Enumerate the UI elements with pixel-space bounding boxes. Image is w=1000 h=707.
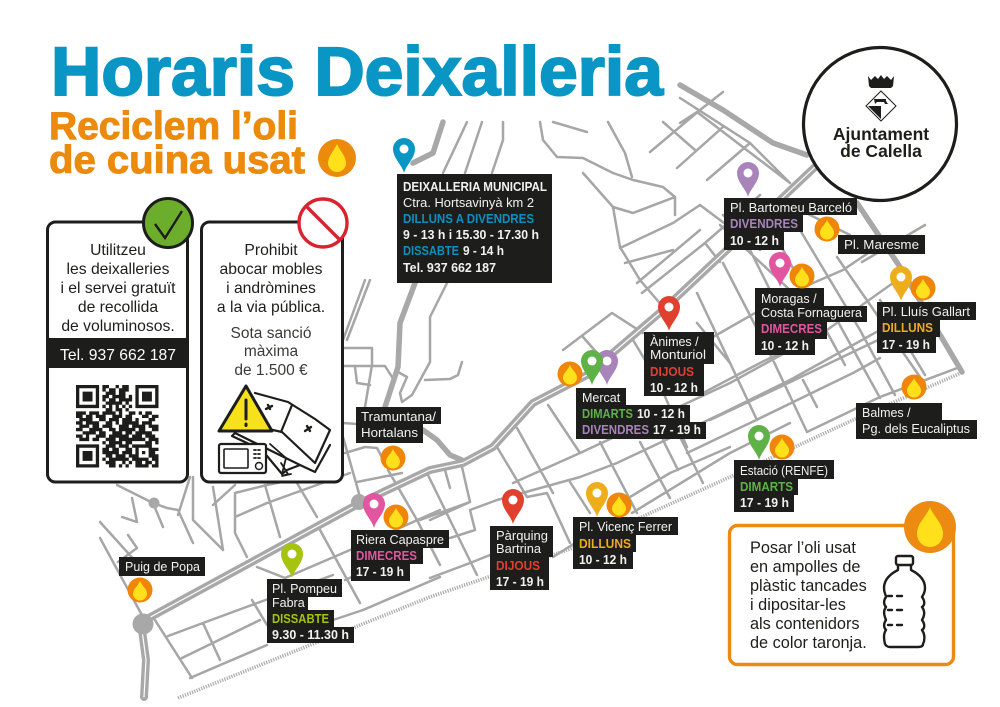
icon: dumped sofa and microwave — [219, 386, 330, 476]
icon: prohibition sign — [299, 199, 347, 247]
instructions text: en ampolles de — [750, 558, 860, 576]
label: Deixalleria Municipal: Ctra. Hortsavinyà km 2 — [403, 196, 534, 210]
instructions text: plàstic tancades — [750, 577, 867, 595]
icon: oil Tramuntana — [380, 446, 406, 470]
icon: coat of arms — [866, 91, 896, 121]
label: Pl. Pompeu Fabra: Fabra — [272, 596, 305, 610]
label: Pl. Vicenç Ferrer: 10 - 12 h — [579, 553, 627, 567]
label: Moragas / Costa Fornaguera: Moragas / — [761, 292, 817, 306]
logo: Ajuntament de Calella — [804, 48, 956, 200]
icon: oil Estació — [770, 434, 794, 460]
pin: Ànimes — [658, 296, 680, 331]
warning triangle — [219, 386, 272, 431]
phone band — [47, 338, 188, 368]
icon: oil Puig de Popa — [128, 578, 152, 602]
label: Moragas / Costa Fornaguera: 10 - 12 h — [761, 339, 809, 353]
icon: green check — [144, 198, 192, 248]
label: Riera Capaspre: 17 - 19 h — [356, 565, 404, 579]
pin: Mercat dimarts — [581, 350, 603, 385]
pin: Riera Capaspre — [363, 493, 385, 528]
pin: Vicenç Ferrer — [586, 482, 608, 517]
street map — [100, 85, 963, 698]
label: Pl. Vicenç Ferrer: Pl. Vicenç Ferrer — [579, 520, 672, 534]
label: Pl. Vicenç Ferrer — [573, 517, 678, 569]
label: Pl. Lluís Gallart: DILLUNS — [882, 321, 933, 335]
label: Estació: Estació (RENFE) — [740, 464, 828, 478]
label: Mercat: 10 - 12 h — [637, 407, 685, 421]
pin: Pàrquing Bartrina — [502, 489, 524, 524]
prohibition text — [217, 242, 325, 316]
label: Pl. Pompeu Fabra: 9.30 - 11.30 h — [272, 628, 349, 642]
label: Puig de Popa — [119, 557, 205, 576]
label: Pl. Bartomeu Barceló: DIVENDRES — [730, 217, 798, 231]
label: Deixalleria Municipal: Tel. 937 662 187 — [403, 261, 496, 275]
label: Deixalleria Municipal: DISSABTE — [403, 244, 459, 258]
prohibition text: Prohibit — [244, 242, 298, 259]
panel: use the deixalleries — [47, 222, 188, 482]
icon: oil drop badge — [904, 501, 956, 553]
panel: prohibited dumping — [202, 222, 342, 482]
icon: oil Bartomeu — [814, 216, 840, 242]
prohibition text: i andròmines — [226, 280, 316, 297]
QR code — [76, 387, 158, 466]
pin: Bartomeu Barceló — [737, 162, 759, 197]
label: Mercat: 17 - 19 h — [653, 423, 701, 437]
icon: oil Riera Capaspre — [384, 504, 408, 530]
label: Estació: DIMARTS — [740, 480, 793, 494]
label: Riera Capaspre — [351, 530, 449, 581]
fine text: Sota sanció — [230, 325, 312, 342]
instructions text: als contenidors — [750, 615, 860, 633]
label: Estació: 17 - 19 h — [740, 496, 789, 510]
label: Deixalleria Municipal: 9 - 13 h i 15.30 - 17.30 h — [403, 228, 539, 242]
label: Deixalleria Municipal: 9 - 14 h — [463, 244, 504, 258]
label: Ànimes / Monturiol — [644, 332, 714, 396]
pin: Lluís Gallart — [890, 266, 912, 301]
subtitle line 1: Reciclem l’oli — [49, 105, 298, 148]
label: Pl. Pompeu Fabra — [267, 579, 354, 643]
icon: plastic bottle — [884, 556, 925, 647]
icon: oil drop in title — [318, 139, 356, 177]
label: Pàrquing Bartrina: DIJOUS — [496, 559, 540, 573]
instructions text: de color taronja. — [750, 634, 867, 652]
icon: oil Balmes — [902, 374, 926, 400]
fine text — [230, 325, 312, 379]
pin: Pompeu Fabra — [281, 543, 303, 578]
label: Pàrquing Bartrina: Bartrina — [496, 542, 541, 556]
pin: Deixalleria — [393, 138, 415, 173]
instructions text: Posar l’oli usat — [750, 539, 856, 557]
label: Pl. Lluís Gallart — [877, 302, 976, 353]
title: Horaris Deixalleria — [51, 33, 664, 110]
label: Tramuntana / Hortalans: Hortalans — [361, 426, 418, 440]
label: Pàrquing Bartrina: 17 - 19 h — [496, 575, 544, 589]
label: Pl. Bartomeu Barceló — [724, 198, 857, 250]
label: Ànimes / Monturiol: Ànimes / — [650, 334, 699, 349]
logo text: Ajuntament — [833, 124, 929, 144]
fine text: màxima — [244, 343, 299, 360]
prohibition text: abocar mobles — [220, 261, 323, 278]
label: Pl. Lluís Gallart: 17 - 19 h — [882, 338, 930, 352]
label: Balmes / Pg. dels Eucaliptus: Pg. dels Eucaliptus — [862, 422, 970, 436]
label: Deixalleria Municipal: DEIXALLERIA MUNICIPAL — [403, 180, 547, 194]
label: Mercat — [576, 388, 706, 439]
icon: oil Gallart — [910, 276, 936, 300]
prohibition text: a la via pública. — [217, 299, 325, 316]
pin: Mercat divendres — [596, 350, 618, 385]
label: Pl. Pompeu Fabra: DISSABTE — [272, 612, 329, 626]
label: Ànimes / Monturiol: 10 - 12 h — [650, 381, 698, 395]
panel text — [60, 242, 176, 335]
label: Ànimes / Monturiol: DIJOUS — [650, 365, 694, 379]
panel text: de recollida — [78, 299, 158, 316]
label: Riera Capaspre: DIMECRES — [356, 549, 417, 563]
label: Pl. Maresme — [838, 235, 925, 254]
label: Deixalleria Municipal — [397, 174, 552, 283]
label: Mercat: DIVENDRES — [582, 423, 649, 437]
label: Pl. Pompeu Fabra: Pl. Pompeu — [272, 582, 337, 596]
label: Pl. Bartomeu Barceló: 10 - 12 h — [730, 234, 779, 248]
icon: crown — [868, 75, 894, 88]
label: Pàrquing Bartrina: Pàrquing — [496, 529, 548, 543]
label: Ànimes / Monturiol: Monturiol — [650, 348, 706, 362]
label: Tramuntana / Hortalans — [356, 407, 441, 443]
label: Pl. Vicenç Ferrer: DILLUNS — [579, 537, 631, 551]
label: Riera Capaspre: Riera Capaspre — [356, 533, 444, 547]
label: Deixalleria Municipal: DILLUNS A DIVENDRES — [403, 212, 534, 226]
subtitle line 2: de cuina usat — [49, 139, 305, 182]
pin: Estació — [748, 425, 770, 460]
icon: oil Mercat — [558, 362, 582, 386]
label: Pl. Maresme: Pl. Maresme — [844, 238, 919, 252]
panel text: de voluminosos. — [61, 318, 175, 335]
label: Moragas / Costa Fornaguera — [755, 288, 867, 355]
logo text: de Calella — [840, 141, 922, 161]
label: Mercat: Mercat — [582, 391, 621, 405]
label: Pàrquing Bartrina — [490, 526, 553, 590]
instructions text: i dipositar-les — [750, 596, 846, 614]
label: Pl. Lluís Gallart: Pl. Lluís Gallart — [882, 305, 971, 319]
label: Tramuntana / Hortalans: Tramuntana/ — [361, 410, 437, 424]
icon: oil Moragas — [790, 264, 814, 288]
label: Puig de Popa: Puig de Popa — [125, 560, 200, 574]
phone band: Tel. 937 662 187 — [60, 347, 176, 364]
label: Mercat: DIMARTS — [582, 407, 633, 421]
label: Moragas / Costa Fornaguera: Costa Fornaguera — [761, 306, 862, 320]
panel text: les deixalleries — [67, 261, 170, 278]
logo text — [833, 124, 929, 161]
label: Balmes / Pg. dels Eucaliptus — [856, 403, 977, 439]
icon: oil Vicenç Ferrer — [606, 492, 632, 518]
instructions text — [750, 539, 867, 652]
pin: Moragas — [769, 252, 791, 287]
fine text: de 1.500 € — [234, 362, 308, 379]
panel text: i el servei gratuït — [60, 280, 176, 297]
label: Estació — [734, 460, 834, 512]
panel: oil instructions — [730, 526, 954, 664]
label: Balmes / Pg. dels Eucaliptus: Balmes / — [862, 406, 911, 420]
label: Pl. Bartomeu Barceló: Pl. Bartomeu Barceló — [730, 201, 852, 215]
panel text: Utilitzeu — [90, 242, 146, 259]
label: Moragas / Costa Fornaguera: DIMECRES — [761, 322, 822, 336]
